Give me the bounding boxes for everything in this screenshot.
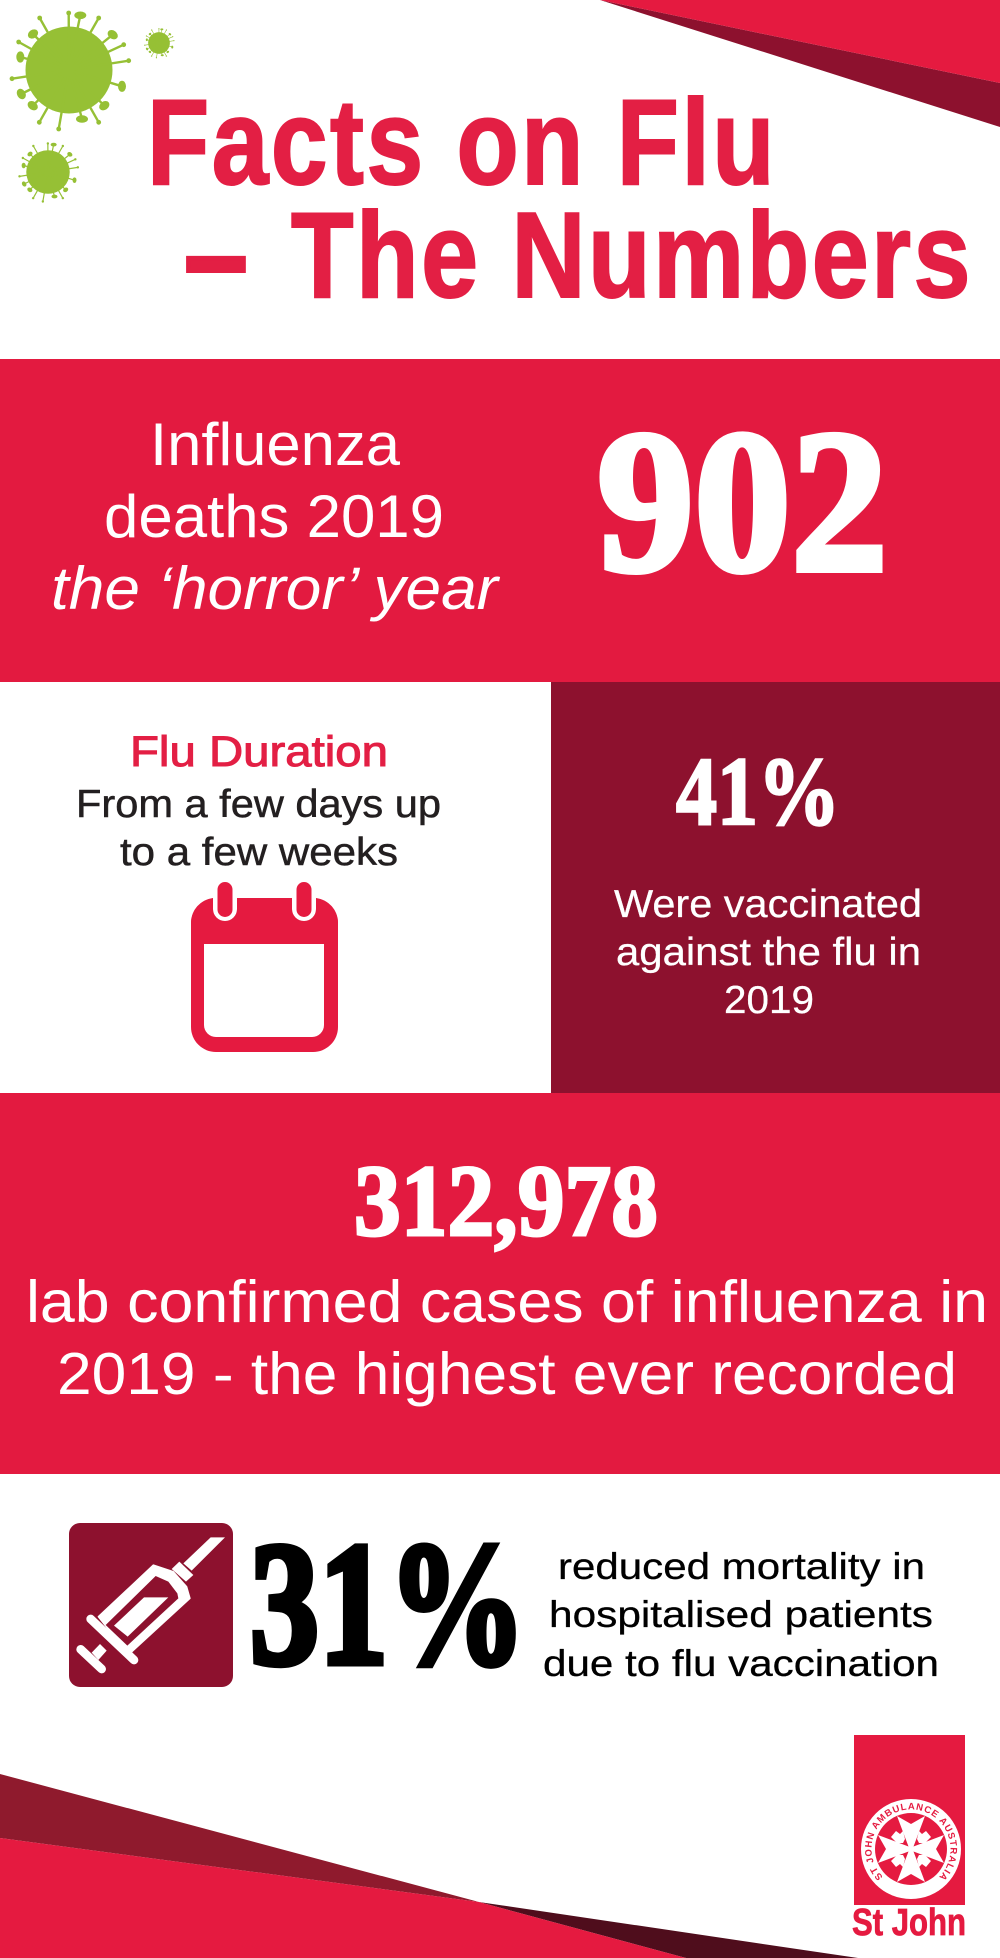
vaccinated text: 2019 xyxy=(724,979,814,1022)
icons: virus cluster xyxy=(10,11,175,203)
logo ring text: ST JOHN AMBULANCE AUSTRALIA xyxy=(865,1802,958,1880)
cases text: 2019 - the highest ever recorded xyxy=(57,1341,957,1407)
vaccinated text: Were vaccinated xyxy=(614,883,922,926)
icon: syringe xyxy=(69,1523,233,1687)
title: Facts on Flu xyxy=(147,74,777,210)
panel: flu duration xyxy=(76,728,441,1052)
logo: St John xyxy=(852,1735,966,1944)
panel: lab confirmed cases xyxy=(0,1093,1000,1474)
flu duration text: to a few weeks xyxy=(120,831,398,874)
deaths label text: Influenza xyxy=(150,411,401,478)
title xyxy=(147,74,973,323)
flu duration text: From a few days up xyxy=(76,783,441,826)
deaths label text: the ‘horror’ year xyxy=(51,555,500,622)
bottom corner wedge xyxy=(0,1774,858,1958)
mortality text xyxy=(543,1546,939,1684)
cases text: lab confirmed cases of influenza in xyxy=(26,1269,988,1335)
flu duration text xyxy=(76,783,441,874)
panel: mortality xyxy=(69,1507,939,1702)
number 41%: 41% xyxy=(676,738,840,846)
title: – xyxy=(185,187,247,323)
logo wordmark: St John xyxy=(852,1902,966,1944)
logo maltese cross xyxy=(878,1816,944,1882)
deaths label text xyxy=(51,411,500,622)
panel: influenza deaths xyxy=(0,359,1000,682)
mortality text: reduced mortality in xyxy=(558,1546,925,1587)
big number 902: 902 xyxy=(597,389,888,615)
vaccinated text xyxy=(614,883,922,1022)
number 31%: 31% xyxy=(250,1507,526,1702)
number 312,978: 312,978 xyxy=(354,1145,658,1258)
top corner wedge xyxy=(600,0,1000,127)
vaccinated text: against the flu in xyxy=(616,931,921,974)
cases text xyxy=(26,1269,988,1407)
panel: vaccinated 41% xyxy=(551,682,1000,1093)
mortality text: hospitalised patients xyxy=(549,1594,933,1635)
icon: calendar xyxy=(191,882,338,1052)
deaths label text: deaths 2019 xyxy=(104,483,444,550)
mortality text: due to flu vaccination xyxy=(543,1643,939,1684)
flu duration heading: Flu Duration xyxy=(130,728,388,776)
